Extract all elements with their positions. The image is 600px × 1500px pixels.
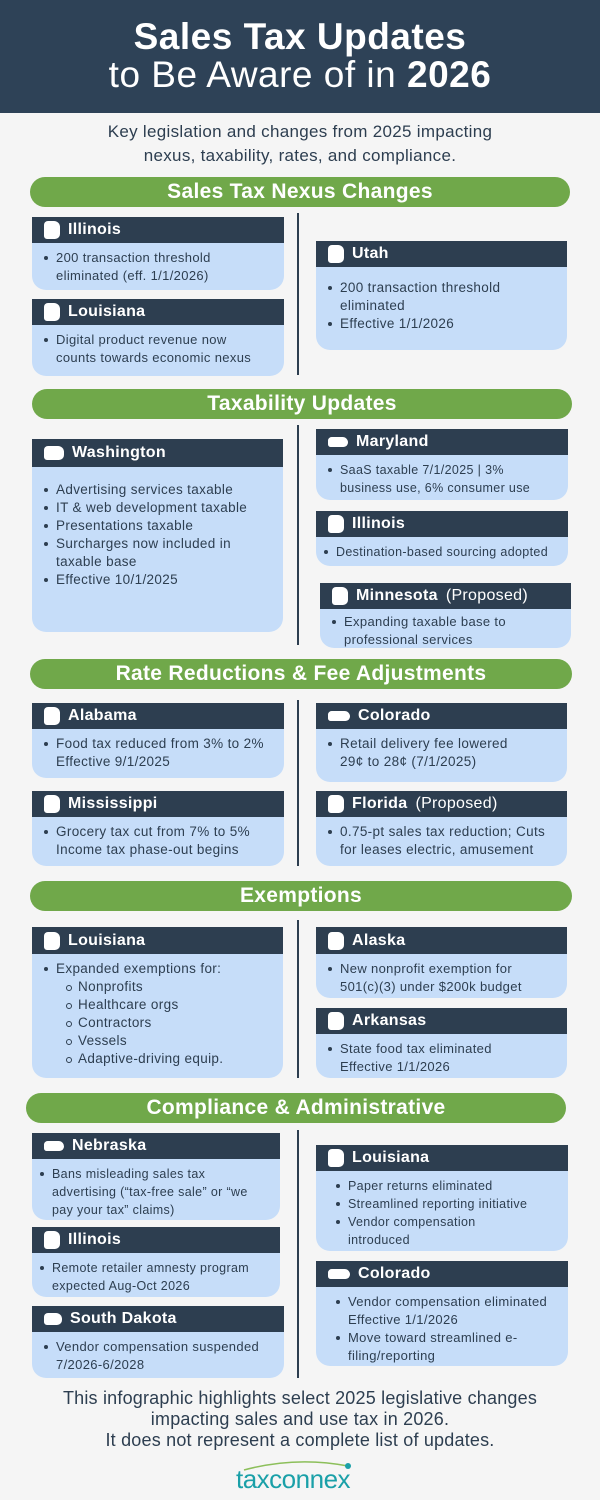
card: Colorado rates: Colorado [358,707,431,724]
card: Alabama: Food tax reduced from 3% to 2% Effective 9/1/2025 [56,736,264,769]
title: Sales Tax Updates [134,16,466,57]
section bar: taxability [32,389,572,419]
footer note: This infographic highlights select 2025 legislative changes [63,1388,537,1408]
card: Mississippi [32,791,284,866]
card: Florida: 0.75-pt sales tax reduction; Cuts for leases electric, amusement [340,824,545,857]
card: Colorado rates: Retail delivery fee lowered 29¢ to 28¢ (7/1/2025) [340,736,508,769]
card: Colorado compliance [316,1261,568,1366]
card: Utah [316,241,567,350]
card: Colorado compliance: Move toward streamlined e-filing/reporting [348,1330,518,1363]
card: Louisiana exemptions: Expanded exemptions for: [56,961,221,976]
card: Illinois compliance [32,1227,280,1297]
card: South Dakota: South Dakota [70,1310,177,1327]
card: Alabama: Alabama [68,707,137,724]
subtitle [108,122,492,165]
card: Illinois taxability [316,511,568,566]
header banner [0,0,600,113]
card: Illinois nexus: 200 transaction threshold eliminated (eff. 1/1/2026) [56,250,211,283]
card: South Dakota: Vendor compensation suspended 7/2026-6/2028 [56,1339,259,1372]
card: Louisiana exemptions: Contractors [78,1015,152,1030]
card: Washington: IT & web development taxable [56,500,247,515]
footer note [63,1388,537,1450]
card: Illinois taxability: Illinois [352,515,405,532]
card: Alabama [32,703,284,778]
card: Florida [316,791,567,866]
card: Louisiana exemptions: Healthcare orgs [78,997,179,1012]
card: Louisiana compliance: Paper returns eliminated [348,1179,493,1193]
card: Washington [32,439,283,632]
card: Louisiana nexus [32,299,284,376]
card: Arkansas: State food tax eliminated Effective 1/1/2026 [340,1041,492,1074]
subtitle: nexus, taxability, rates, and compliance. [144,146,456,165]
card: Washington: Washington [72,444,166,461]
card: Utah: Effective 1/1/2026 [340,316,454,331]
card: Maryland [316,429,568,500]
card: Louisiana compliance: Vendor compensation introduced [348,1215,476,1247]
card: Maryland: Maryland [356,433,429,450]
section bar: rates: Rate Reductions & Fee Adjustments [116,662,486,685]
card: Utah: Utah [352,245,389,262]
card: Minnesota: (Proposed) [446,587,528,604]
card: Washington: Advertising services taxable [56,482,233,497]
card: Illinois compliance: Remote retailer amnesty program expected Aug-Oct 2026 [52,1261,249,1293]
card: Louisiana nexus: Louisiana [68,303,145,320]
card: Washington: Surcharges now included in taxable base [56,536,231,569]
section bar: exemptions [30,881,572,911]
card: Louisiana exemptions: Vessels [78,1033,127,1048]
section bar: nexus: Sales Tax Nexus Changes [167,180,433,203]
card: Colorado rates [316,703,567,782]
card: Washington: Effective 10/1/2025 [56,572,178,587]
card: Colorado compliance: Vendor compensation eliminated Effective 1/1/2026 [348,1294,547,1327]
card: Louisiana exemptions: Nonprofits [78,979,143,994]
card: Arkansas: Arkansas [352,1012,426,1029]
card: Illinois compliance: Illinois [68,1231,121,1248]
card: Minnesota [320,583,571,648]
section bar: compliance [26,1093,566,1123]
section bar: compliance: Compliance & Administrative [146,1096,446,1119]
card: Florida: Florida [352,795,407,812]
card: Louisiana exemptions [32,927,283,1078]
card: Illinois taxability: Destination-based sourcing adopted [336,545,548,559]
card: Utah: 200 transaction threshold eliminated [340,280,500,313]
footer note: impacting sales and use tax in 2026. [151,1409,449,1429]
title [109,16,491,95]
section bar: exemptions: Exemptions [240,884,362,907]
section bar: taxability: Taxability Updates [207,392,397,415]
card: Alaska: Alaska [352,932,405,948]
card: Minnesota: Minnesota [356,587,438,604]
card: Alaska [316,927,567,998]
card: Maryland: SaaS taxable 7/1/2025 | 3% business use, 6% consumer use [340,463,530,495]
card: Nebraska: Nebraska [72,1137,146,1154]
card: Alaska: New nonprofit exemption for 501(c)(3) under $200k budget [340,961,522,994]
card: Arkansas [316,1008,567,1078]
card: Louisiana compliance: Louisiana [352,1149,429,1166]
card: Mississippi: Mississippi [68,795,158,812]
card: Louisiana compliance: Streamlined reporting initiative [348,1197,527,1211]
title: to Be Aware of in 2026 [109,54,491,95]
card: South Dakota [32,1306,284,1378]
logo: taxconnex: taxconnex [236,1464,350,1494]
card: Louisiana nexus: Digital product revenue now counts towards economic nexus [56,332,251,365]
card: Florida: (Proposed) [415,795,498,812]
card: Louisiana exemptions: Louisiana [68,932,145,948]
footer note: It does not represent a complete list of updates. [105,1430,495,1450]
subtitle: Key legislation and changes from 2025 impacting [108,122,492,141]
card: Illinois nexus: Illinois [68,221,121,238]
card: Nebraska [32,1133,280,1220]
card: Nebraska: Bans misleading sales tax advertising (“tax-free sale” or “we pay your tax” claims) [52,1167,248,1217]
card: Colorado compliance: Colorado [358,1265,431,1282]
section bar: rates [30,659,572,689]
card: Louisiana compliance [316,1145,568,1251]
section bar: nexus [30,177,570,207]
card: Illinois nexus [32,217,284,290]
card: Minnesota: Expanding taxable base to professional services [344,614,506,647]
card: Louisiana exemptions: Adaptive-driving equip. [78,1051,223,1066]
card: Washington: Presentations taxable [56,518,193,533]
card: Mississippi: Grocery tax cut from 7% to 5% Income tax phase-out begins [56,824,250,857]
